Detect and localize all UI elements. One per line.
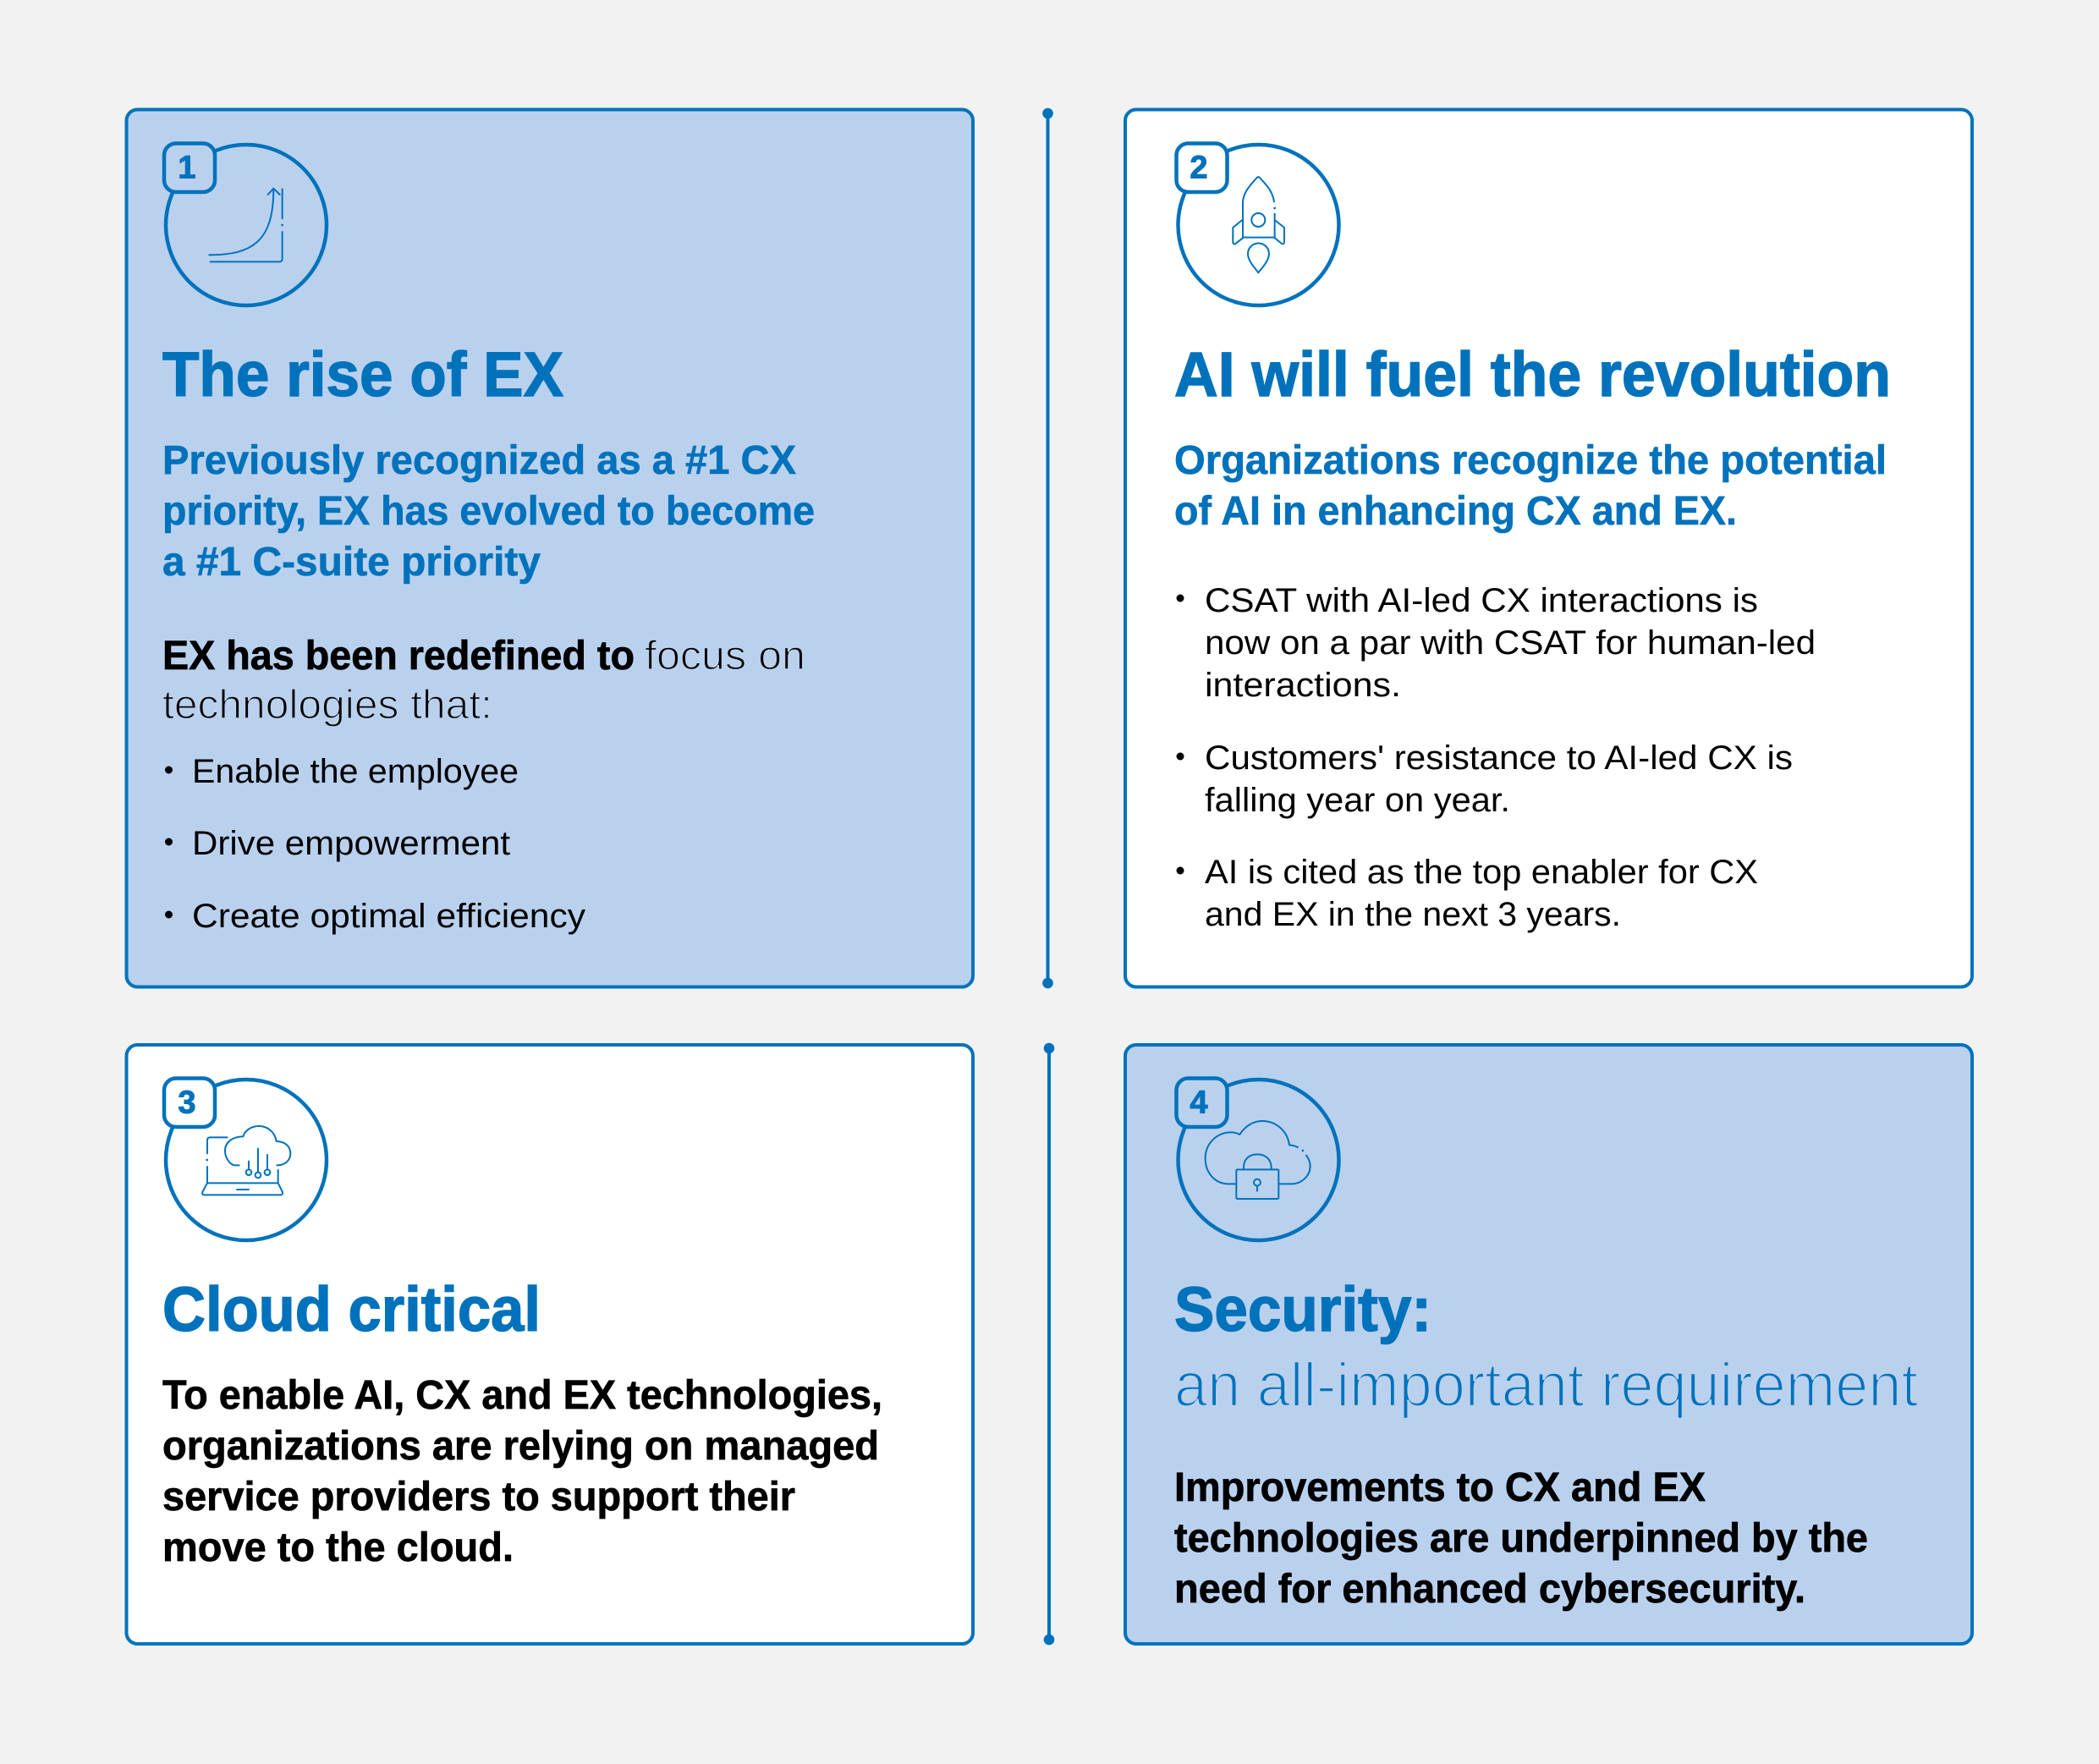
heading: security	[1174, 1274, 1918, 1420]
badge: number 1: 1	[178, 151, 196, 186]
heading: cloud critical: Cloud critical	[162, 1274, 541, 1344]
text block: EX redefined: focus on	[645, 634, 805, 679]
text block: EX redefined: EX has been redefined to	[162, 634, 635, 679]
divider: bottom row	[1044, 1043, 1054, 1645]
text block: managed service providers	[162, 1373, 882, 1570]
bullet list: technology focus: Drive empowerment	[192, 825, 510, 862]
bullet list: AI findings	[1176, 582, 1816, 933]
badge: number 2: 2	[1190, 151, 1208, 186]
text block: EX redefined: technologies that:	[162, 683, 492, 728]
bullet list: AI findings: AI is cited as the top enabler for CX	[1205, 854, 1758, 891]
text block: managed service providers: organizations are relying on managed	[162, 1424, 879, 1469]
badge: number 3: 3	[178, 1085, 196, 1120]
bullet list: technology focus: Enable the employee	[192, 753, 519, 790]
badge: number 2	[1176, 144, 1227, 192]
subheading: priority statement: Previously recognized as a #1 CX	[162, 438, 796, 483]
icon: growth chart in circle	[166, 145, 327, 305]
text block: cybersecurity: Improvements to CX and EX	[1174, 1465, 1706, 1510]
subheading: priority statement: a #1 C-suite priority	[162, 540, 541, 585]
heading: security: an all-important requirement	[1174, 1351, 1918, 1420]
text block: cybersecurity	[1174, 1465, 1868, 1612]
badge: number 3	[164, 1078, 215, 1127]
text block: managed service providers: move to the cloud.	[162, 1525, 514, 1570]
panel: AI will fuel the revolution	[1125, 110, 1972, 986]
panel: cloud critical	[127, 1045, 973, 1644]
icon: rocket in circle	[1178, 145, 1338, 305]
text block: EX redefined	[162, 634, 805, 728]
subheading: priority statement	[162, 438, 815, 585]
icon: cloud and padlock in circle	[1178, 1080, 1338, 1240]
bullet list: AI findings: interactions.	[1205, 667, 1401, 704]
bullet list: AI findings: and EX in the next 3 years.	[1205, 896, 1621, 933]
badge: number 1	[164, 144, 215, 192]
bullet list: AI findings: falling year on year.	[1205, 782, 1510, 819]
bullet list: AI findings: CSAT with AI-led CX interactions is	[1205, 582, 1758, 619]
icon: laptop and cloud in circle	[166, 1080, 327, 1240]
subheading: priority statement: priority, EX has evolved to become	[162, 489, 815, 534]
panel: security	[1125, 1045, 1972, 1644]
text block: managed service providers: To enable AI, CX and EX technologies,	[162, 1373, 882, 1418]
bullet list: technology focus: Create optimal efficiency	[192, 898, 585, 935]
bullet list: AI findings: now on a par with CSAT for human-led	[1205, 624, 1816, 662]
divider: top row	[1042, 108, 1053, 988]
heading: security: Security:	[1174, 1274, 1431, 1344]
badge: number 4: 4	[1190, 1085, 1208, 1120]
text block: managed service providers: service providers to support their	[162, 1475, 795, 1519]
subheading: potential of AI	[1174, 438, 1887, 534]
subheading: potential of AI: Organizations recognize the potential	[1174, 438, 1887, 483]
panel: the rise of EX	[127, 110, 973, 986]
heading: AI will fuel the revolution: AI will fuel the revolution	[1174, 339, 1891, 409]
bullet list: technology focus	[165, 753, 585, 935]
subheading: potential of AI: of AI in enhancing CX and EX.	[1174, 489, 1737, 534]
badge: number 4	[1176, 1078, 1227, 1127]
heading: the rise of EX: The rise of EX	[162, 339, 563, 409]
bullet list: AI findings: Customers' resistance to AI-led CX is	[1205, 739, 1793, 777]
text block: cybersecurity: technologies are underpinned by the	[1174, 1516, 1868, 1561]
text block: cybersecurity: need for enhanced cybersecurity.	[1174, 1567, 1805, 1612]
